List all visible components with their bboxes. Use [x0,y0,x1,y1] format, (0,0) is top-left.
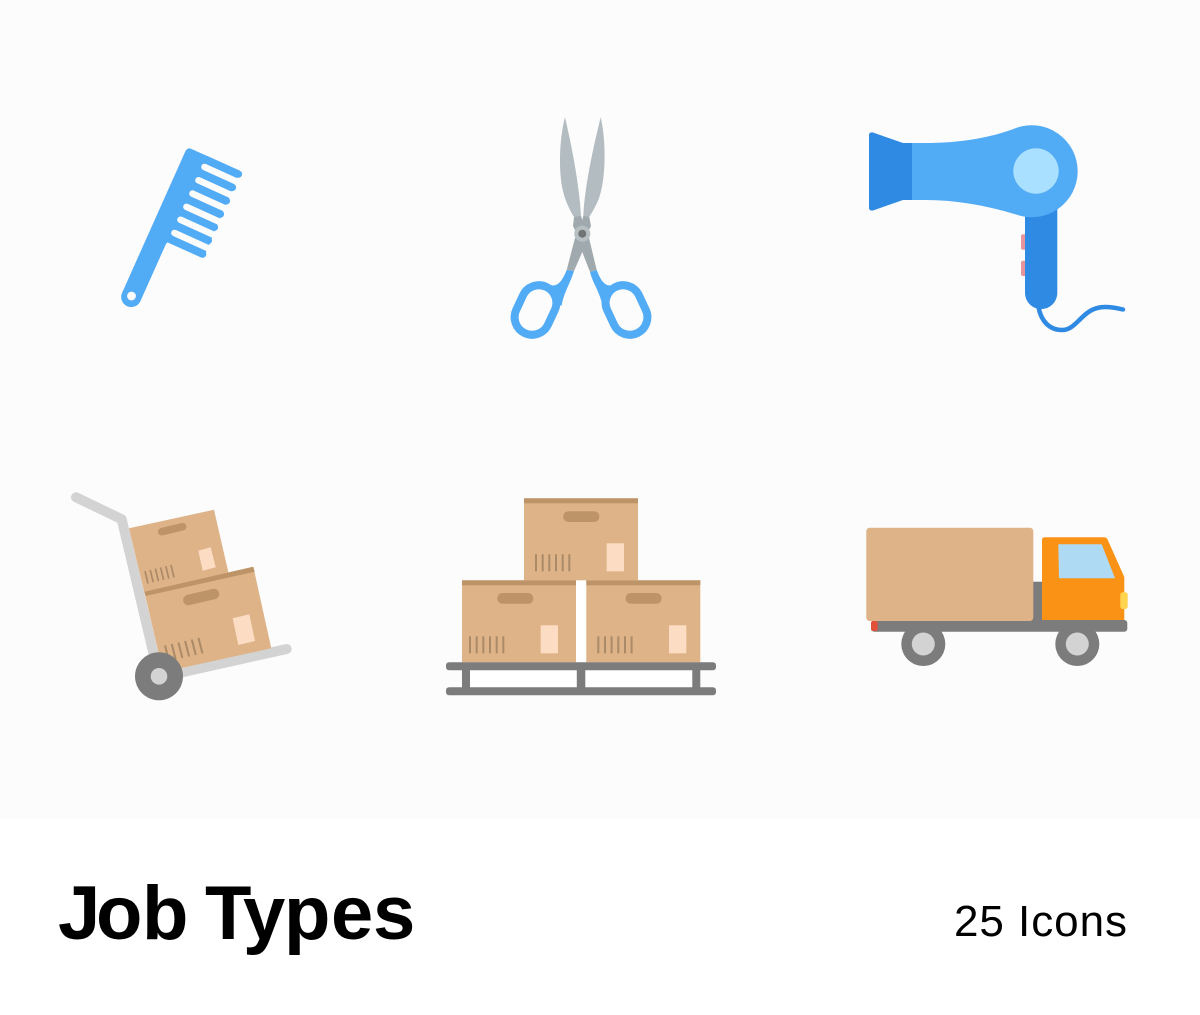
icon count label: 25 Icons [954,897,1127,946]
icon: hair dryer [869,125,1123,330]
title: Job Types [58,871,415,956]
icon: comb [121,148,250,307]
icon: hand truck with boxes [76,497,287,700]
icon: pallet of boxes [446,498,716,695]
icon: delivery truck [866,528,1128,666]
icon: scissors [509,117,653,341]
